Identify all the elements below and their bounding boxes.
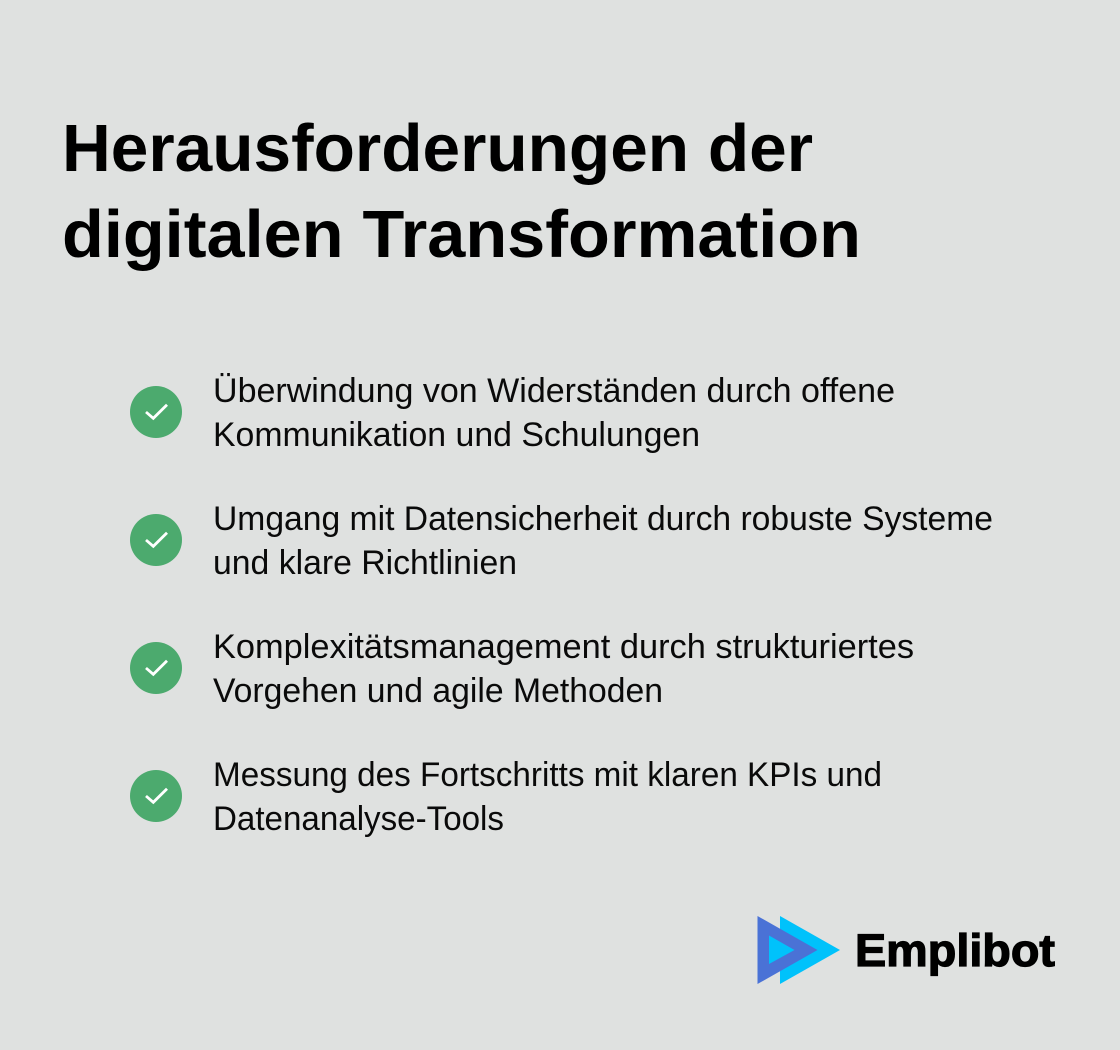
checklist bbox=[130, 372, 993, 838]
text: item 1: Überwindung von Widerständen durch offene bbox=[213, 372, 895, 410]
icon: check 4 bbox=[130, 770, 182, 822]
logo: Emplibot bbox=[758, 916, 1055, 984]
text: item 1 bbox=[213, 372, 895, 454]
text: item 3: Komplexitätsmanagement durch strukturiertes bbox=[213, 628, 914, 666]
item 1 bbox=[130, 372, 895, 454]
text: item 4: Datenanalyse-Tools bbox=[213, 800, 504, 838]
text: item 2: Umgang mit Datensicherheit durch robuste Systeme bbox=[213, 500, 993, 538]
wordmark: Emplibot bbox=[855, 925, 1055, 976]
title bbox=[62, 111, 861, 272]
title: Herausforderungen der bbox=[62, 111, 813, 186]
text: item 2: und klare Richtlinien bbox=[213, 544, 517, 582]
item 4 bbox=[130, 756, 882, 838]
icon: check 3 bbox=[130, 642, 182, 694]
text: item 4 bbox=[213, 756, 882, 838]
text: item 3 bbox=[213, 628, 914, 710]
item 2 bbox=[130, 500, 993, 582]
text: item 1: Kommunikation und Schulungen bbox=[213, 416, 700, 454]
text: item 2 bbox=[213, 500, 993, 582]
item 3 bbox=[130, 628, 914, 710]
text: item 4: Messung des Fortschritts mit klaren KPIs und bbox=[213, 756, 882, 794]
icon: play triangles bbox=[758, 916, 840, 984]
icon: check 1 bbox=[130, 386, 182, 438]
icon: check 2 bbox=[130, 514, 182, 566]
title: digitalen Transformation bbox=[62, 197, 861, 272]
text: item 3: Vorgehen und agile Methoden bbox=[213, 672, 663, 710]
